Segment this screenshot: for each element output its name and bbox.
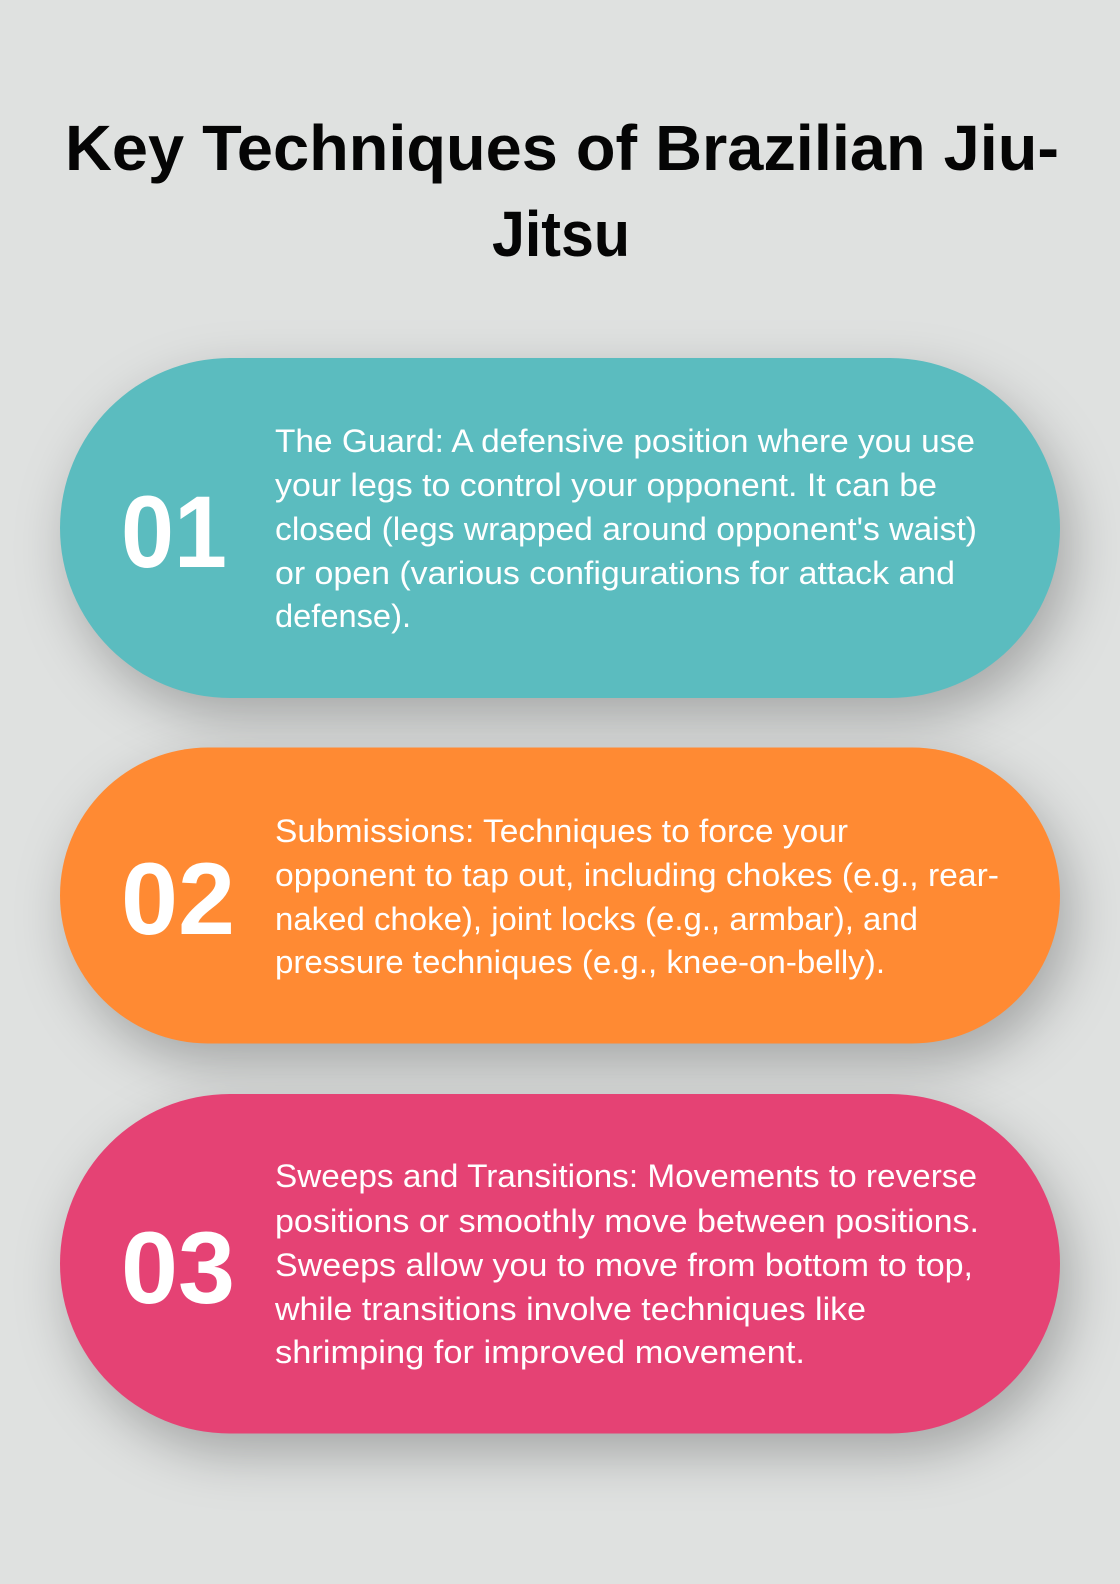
panel: 01 The Guard <box>60 358 1060 698</box>
title: Jitsu <box>492 198 630 270</box>
description: Submissions: pressure techniques (e.g., knee-on-belly). <box>275 944 885 980</box>
pink pill background <box>60 1094 1060 1434</box>
teal pill background <box>60 358 1060 698</box>
description: The Guard: The Guard: A defensive position where you use <box>275 423 975 459</box>
description: Sweeps and Transitions: shrimping for improved movement. <box>275 1334 805 1370</box>
description: The Guard: your legs to control your opponent. It can be <box>275 467 937 503</box>
description: Sweeps and Transitions <box>274 1158 979 1370</box>
description: Submissions: opponent to tap out, including chokes (e.g., rear- <box>275 857 999 893</box>
number 01: 01 <box>121 475 227 589</box>
description: The Guard: closed (legs wrapped around opponent's waist) <box>275 511 977 547</box>
description: Submissions: naked choke), joint locks (e.g., armbar), and <box>275 901 918 937</box>
title <box>65 112 1059 270</box>
number 03: 03 <box>121 1211 235 1325</box>
panel: 03 Sweeps and Transitions <box>60 1094 1060 1434</box>
description: Submissions <box>275 813 999 980</box>
description: The Guard: defense). <box>275 598 411 634</box>
title: Key Techniques of Brazilian Jiu- <box>65 112 1059 184</box>
description: Sweeps and Transitions: positions or smoothly move between positions. <box>275 1203 979 1239</box>
description: The Guard: or open (various configurations for attack and <box>275 555 955 591</box>
description: Sweeps and Transitions: Sweeps and Transitions: Movements to reverse <box>275 1158 977 1194</box>
description: Sweeps and Transitions: while transitions involve techniques like <box>274 1291 866 1327</box>
number 02: 02 <box>121 842 235 956</box>
panel: 02 Submissions <box>60 748 1060 1044</box>
description: Submissions: Submissions: Techniques to force your <box>275 813 848 849</box>
description: The Guard <box>275 423 977 634</box>
description: Sweeps and Transitions: Sweeps allow you to move from bottom to top, <box>275 1247 973 1283</box>
orange pill background <box>60 748 1060 1044</box>
